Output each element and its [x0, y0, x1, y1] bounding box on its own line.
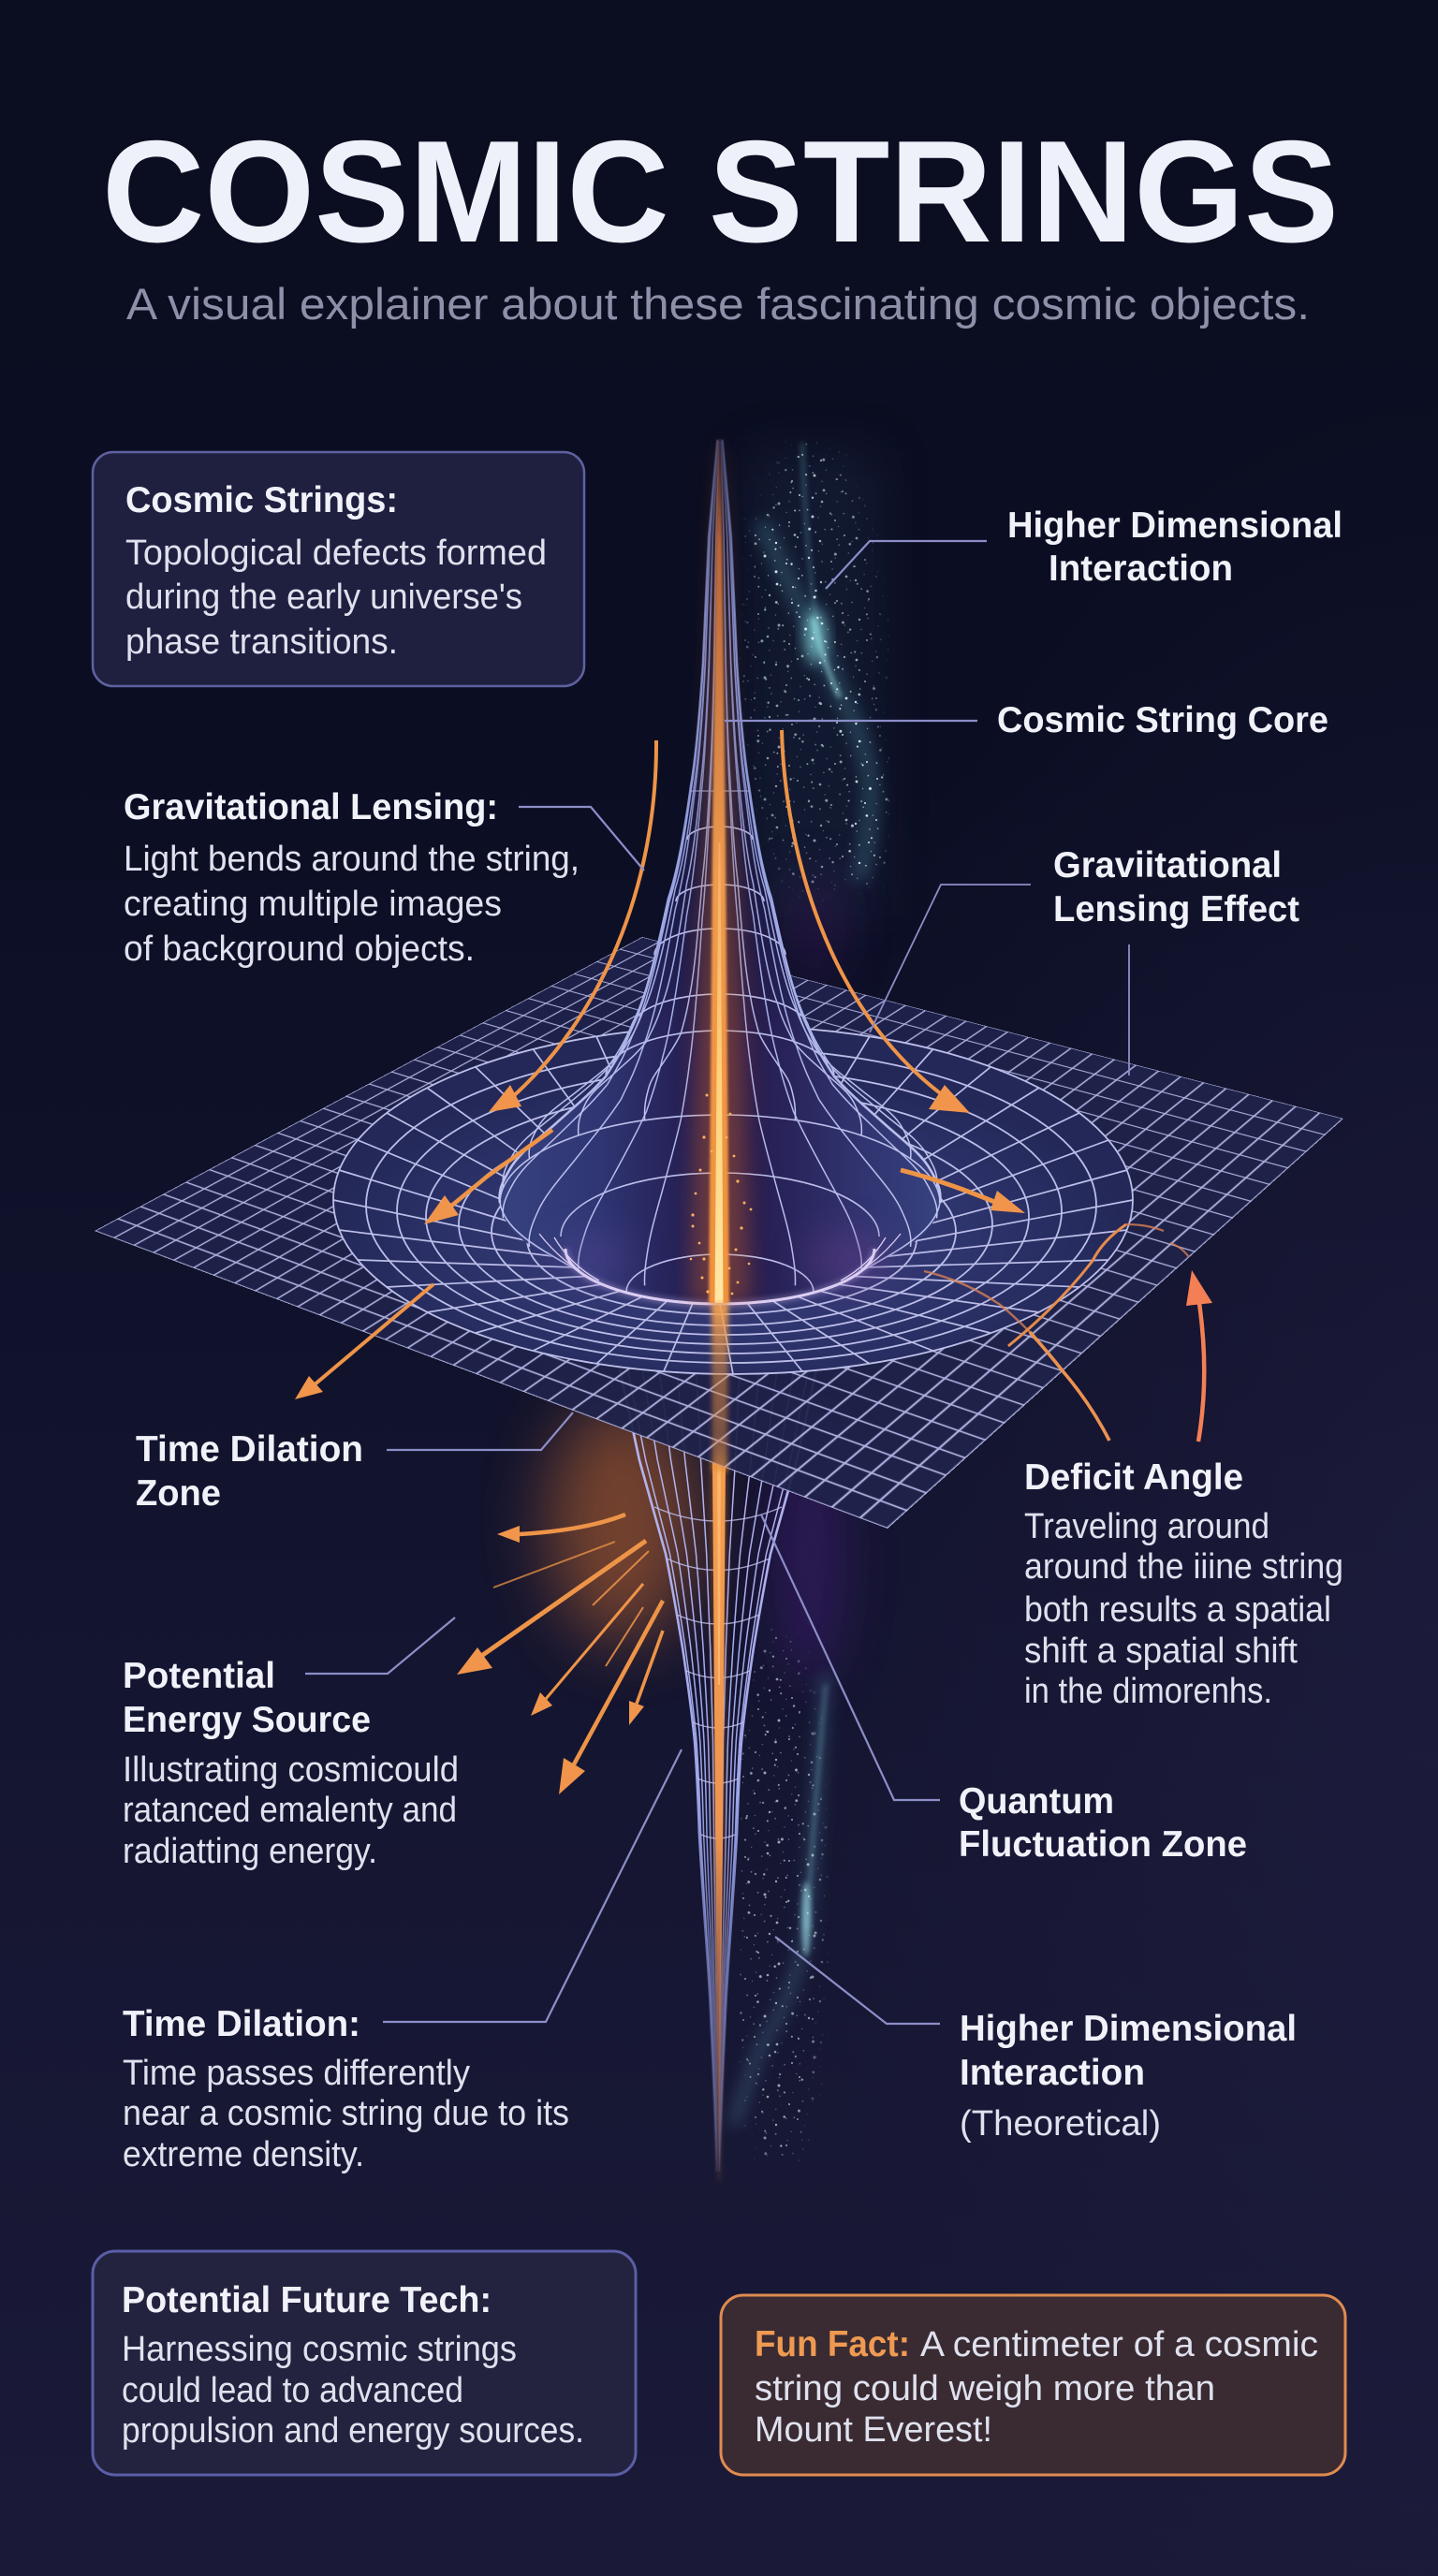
label: gravitational lensing effect: Graviitational	[1053, 845, 1282, 886]
arrow: time dilation zone	[295, 1284, 433, 1399]
text block: gravitational lensing: creating multiple images	[124, 885, 502, 924]
background scene: nebulae, lower funnel and energy burst	[507, 440, 889, 2181]
text block: time dilation: Time passes differently	[123, 2054, 470, 2093]
text block: deficit angle: in the dimorenhs.	[1024, 1672, 1272, 1711]
lower nebula: higher dimensional interaction	[734, 1629, 829, 2162]
arrow: light path right, lensing	[782, 730, 970, 1113]
deficit angle arrows	[924, 1224, 1212, 1442]
body text: Harnessing cosmic strings	[122, 2330, 517, 2369]
panel: fun fact	[721, 2295, 1345, 2475]
panel: potential future tech	[93, 2251, 636, 2475]
label: quantum fluctuation zone	[959, 1781, 1247, 1865]
arrow: light path left inner	[424, 1130, 552, 1224]
radial grid lines	[333, 1026, 1133, 1374]
text block: deficit angle: Deficit Angle	[1024, 1457, 1243, 1498]
label: higher dimensional interaction top	[1007, 505, 1343, 589]
label: higher dimensional interaction bottom	[960, 2009, 1297, 2144]
text block: potential energy source: Potential	[123, 1656, 275, 1696]
leader lines	[305, 541, 1129, 2024]
spacetime mesh plane	[95, 937, 1343, 1529]
text block: deficit angle: both results a spatial	[1024, 1590, 1331, 1630]
text block: gravitational lensing: Light bends around the string,	[124, 840, 580, 879]
heading: Potential Future Tech:	[122, 2280, 492, 2320]
lower funnel wireframe	[615, 1348, 821, 2172]
fun fact text	[755, 2325, 1318, 2450]
text block: gravitational lensing	[124, 787, 580, 969]
burst glow: potential energy source	[548, 871, 847, 1685]
body text: could lead to advanced	[122, 2371, 463, 2410]
body text: Topological defects formed	[125, 534, 547, 573]
sparks around string	[690, 1093, 752, 1295]
text block: potential energy source: radiatting energy.	[123, 1832, 377, 1871]
fun fact text: A centimeter of a cosmic	[920, 2325, 1318, 2364]
label: quantum fluctuation zone: Fluctuation Zone	[959, 1824, 1247, 1865]
text block: deficit angle	[1024, 1457, 1343, 1711]
text block: gravitational lensing: Gravitational Lensing:	[124, 787, 498, 827]
text block: time dilation: near a cosmic string due to its	[123, 2094, 569, 2133]
fun fact text: string could weigh more than	[755, 2369, 1215, 2408]
text block: deficit angle: around the iiine string	[1024, 1547, 1343, 1587]
label: higher dimensional interaction bottom: (Theoretical)	[960, 2104, 1161, 2144]
text block: potential energy source: Energy Source	[123, 1700, 371, 1740]
cosmic string core, upper section	[690, 440, 752, 1471]
text block: potential energy source: ratanced emalenty and	[123, 1791, 457, 1830]
arrow: light path left, lensing	[489, 740, 656, 1112]
label: higher dimensional interaction top: Interaction	[1049, 549, 1233, 589]
throat lip glow	[539, 1233, 901, 1304]
label: higher dimensional interaction top: Higher Dimensional	[1007, 505, 1343, 546]
upper nebula: higher dimensional interaction	[740, 440, 889, 917]
text block: gravitational lensing: of background objects.	[124, 929, 475, 969]
fun fact text: Mount Everest!	[755, 2410, 992, 2450]
label: higher dimensional interaction bottom: Higher Dimensional	[960, 2009, 1297, 2049]
upper horn of warped spacetime	[500, 357, 940, 1304]
body text	[125, 534, 547, 662]
text block: time dilation: extreme density.	[123, 2135, 364, 2174]
label: quantum fluctuation zone: Quantum	[959, 1781, 1114, 1822]
body text: during the early universe's	[125, 578, 522, 617]
panel: cosmic strings definition	[93, 452, 584, 686]
subtitle: A visual explainer about these fascinating cosmic objects.	[126, 279, 1310, 329]
text block: potential energy source: Illustrating cosmicould	[123, 1750, 459, 1790]
label: cosmic string core: Cosmic String Core	[997, 700, 1328, 740]
label: time dilation zone	[136, 1429, 363, 1514]
funnel rim disc and polar grid	[333, 1026, 1133, 1374]
text block: time dilation	[123, 2004, 569, 2174]
body text: propulsion and energy sources.	[122, 2411, 584, 2451]
arrow: right short deflection	[901, 1170, 1025, 1213]
label: time dilation zone: Time Dilation	[136, 1429, 363, 1470]
text block: deficit angle: Traveling around	[1024, 1507, 1269, 1546]
label: gravitational lensing effect: Lensing Effect	[1053, 889, 1299, 929]
heading: Cosmic Strings:	[125, 480, 398, 520]
body text: phase transitions.	[125, 622, 398, 662]
label: gravitational lensing effect	[1053, 845, 1299, 929]
body text	[122, 2330, 584, 2451]
concentric rings	[333, 1026, 1133, 1374]
text block: time dilation: Time Dilation:	[123, 2004, 360, 2044]
energy burst arrows	[457, 1515, 663, 1794]
title: COSMIC STRINGS	[102, 110, 1339, 272]
fun fact label: Fun Fact:	[755, 2324, 910, 2364]
lower cosmic string	[710, 1310, 730, 2181]
text block: potential energy source	[123, 1656, 459, 1871]
horn meridians	[500, 357, 940, 1286]
string seen through the mesh	[712, 1303, 728, 1471]
label: higher dimensional interaction bottom: Interaction	[960, 2053, 1145, 2093]
horn rings	[500, 791, 940, 1292]
label: time dilation zone: Zone	[136, 1473, 221, 1514]
text block: deficit angle: shift a spatial shift	[1024, 1632, 1298, 1671]
